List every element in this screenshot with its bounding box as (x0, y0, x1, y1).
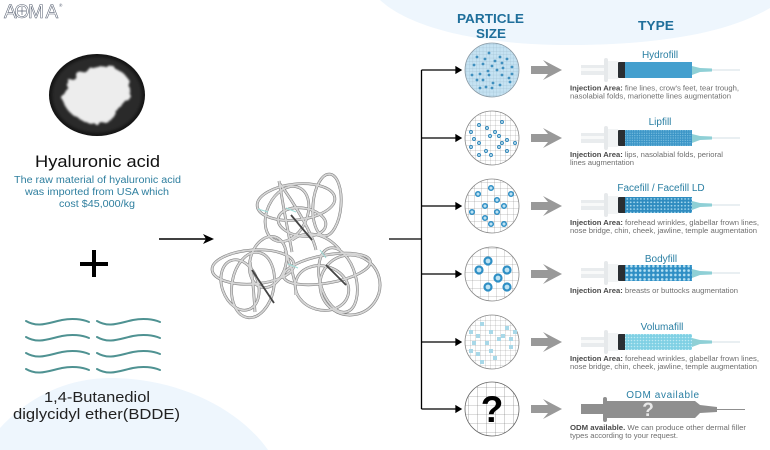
type: Bodyfill (570, 254, 740, 295)
text block: hyaluronic acid origin: cost $45,000/kg (59, 199, 135, 210)
type: Lipfill (570, 117, 740, 167)
type: ODM available: ODM available (626, 390, 700, 401)
type: Hydrofill (570, 50, 740, 100)
arrow: to cross-linked structure (159, 234, 214, 244)
background blob: top right (380, 0, 770, 45)
heading: particle size: SIZE (476, 27, 506, 41)
syringe: Facefill (581, 193, 740, 217)
particle circle: Lipfill (465, 111, 519, 165)
illustration: cross-linked hyaluronic acid coil (211, 173, 385, 321)
text block: hyaluronic acid origin: was imported from USA which (24, 187, 169, 198)
type: Hydrofill: Hydrofill (642, 50, 678, 61)
particle circle: Hydrofill (465, 43, 519, 97)
particle circle: Volumafill (465, 315, 519, 369)
connector: branching bracket (389, 67, 461, 412)
syringe: Lipfill (581, 126, 740, 150)
heading: particle size: PARTICLE (457, 12, 524, 26)
type: Lipfill: Lipfill (649, 117, 671, 128)
gray arrows: particle to type (531, 60, 562, 419)
syringe: Hydrofill (581, 58, 740, 82)
type: ODM available: ODM available. We can produce other dermal filler (570, 423, 747, 432)
logo: AOMA (4, 2, 58, 23)
particle circle: ODM unknown: ? (481, 389, 503, 430)
particle circle: ODM unknown (465, 382, 519, 436)
heading: Hyaluronic acid: Hyaluronic acid (35, 152, 160, 171)
type: Volumafill: Volumafill (641, 322, 683, 333)
particle circle: Facefill (465, 179, 519, 233)
background blob: bottom left (0, 378, 268, 450)
type: Volumafill: Injection Area: forehead wrinkles, glabellar frown lines, (570, 354, 759, 363)
type: ODM available: types according to your request. (570, 431, 678, 440)
type: Hydrofill: nasolabial folds, marionette lines augmentation (570, 92, 731, 100)
heading: particle size (457, 12, 524, 41)
type: Volumafill: nose bridge, chin, cheek, jawline, temple augmentation (570, 362, 757, 371)
heading: BDDE (13, 389, 180, 423)
text block: hyaluronic acid origin: The raw material of hyaluronic acid (14, 175, 181, 186)
type: Facefill: nose bridge, chin, cheek, jawline, temple augmentation (570, 226, 757, 235)
icon: plus (80, 250, 108, 277)
logo: ® (59, 2, 63, 8)
type: Facefill (570, 183, 759, 235)
heading: BDDE: 1,4-Butanediol (44, 389, 150, 406)
type: Facefill: Facefill / Facefill LD (617, 183, 705, 194)
heading: BDDE: diglycidyl ether(BDDE) (13, 406, 180, 423)
icon: BDDE wavy molecules (26, 319, 160, 373)
image: hyaluronic acid powder on dark plate (49, 54, 145, 136)
type: Lipfill: lines augmentation (570, 158, 634, 167)
type: Volumafill (570, 322, 759, 371)
type: Lipfill: Injection Area: lips, nasolabial folds, perioral (570, 150, 723, 159)
type: Hydrofill: Injection Area: fine lines, crow's feet, tear trough, (570, 84, 739, 92)
type: ODM available (570, 390, 747, 440)
heading: type: TYPE (638, 19, 674, 33)
text block: hyaluronic acid origin (14, 175, 181, 210)
syringe: ODM silhouette (581, 397, 745, 422)
particle circle: Bodyfill (465, 247, 519, 301)
type: Facefill: Injection Area: forehead wrinkles, glabellar frown lines, (570, 218, 759, 227)
type: Bodyfill: Injection Area: breasts or buttocks augmentation (570, 286, 738, 295)
syringe: ODM silhouette: ? (642, 400, 654, 421)
syringe: Volumafill (581, 330, 740, 354)
syringe: Bodyfill (581, 261, 740, 285)
type: Bodyfill: Bodyfill (645, 254, 677, 265)
